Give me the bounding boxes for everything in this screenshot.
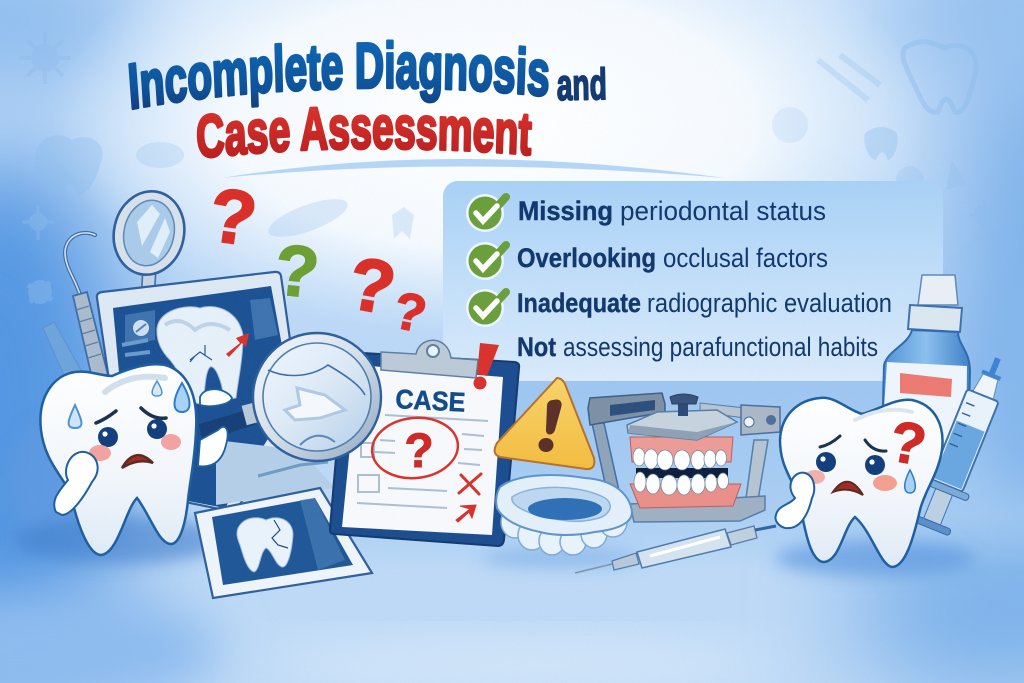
icon: worried tooth right xyxy=(775,398,943,567)
tear xyxy=(905,470,915,493)
icon: aligner tray xyxy=(496,475,632,555)
decorative swoosh under title xyxy=(222,159,725,178)
panel: checklist xyxy=(443,181,943,381)
row: missing periodontal status xyxy=(466,194,826,232)
icon: medicine bottle xyxy=(882,275,970,450)
upper gum xyxy=(630,437,733,462)
panel: small x-ray film xyxy=(195,488,372,598)
title word: and: and xyxy=(556,60,607,110)
icon: dental mirror xyxy=(106,185,192,302)
lower teeth xyxy=(634,472,728,495)
title line 1: Incomplete Diagnosis xyxy=(128,40,549,110)
doodle: germ top left xyxy=(19,32,71,84)
row: overlooking occlusal factors: Overlooking xyxy=(517,243,656,273)
faded dental doodles xyxy=(19,32,1000,304)
row: inadequate radiographic evaluation: radiographic evaluation xyxy=(647,288,892,318)
sweat drops xyxy=(69,405,81,428)
icon: clipboard xyxy=(330,340,519,546)
hand xyxy=(775,473,814,528)
icon: magnifying glass xyxy=(198,333,381,466)
ground shadows xyxy=(10,415,975,576)
title line 2: Case Assessment xyxy=(196,106,532,158)
lower scan detail xyxy=(216,440,335,505)
row: not assessing parafunctional habits: Not xyxy=(517,332,556,362)
question mark green: ? xyxy=(271,230,323,314)
row: inadequate radiographic evaluation: Inadequate xyxy=(517,288,641,318)
icon: warning triangle xyxy=(495,378,594,469)
form lines xyxy=(357,415,488,508)
lower gum xyxy=(630,484,741,508)
row: overlooking occlusal factors: occlusal factors xyxy=(663,243,828,273)
face xyxy=(816,452,836,472)
upper teeth xyxy=(633,448,726,470)
icon: bottom syringe xyxy=(575,526,776,573)
hand xyxy=(54,452,98,515)
icon: right syringe xyxy=(906,349,1021,537)
title xyxy=(128,40,607,158)
icon: clipboard: ? xyxy=(404,425,434,478)
row: not assessing parafunctional habits: assessing parafunctional habits xyxy=(563,332,878,362)
red arrow mark xyxy=(456,505,476,522)
icon: small cartridge background xyxy=(43,322,82,384)
gripping hand xyxy=(198,389,232,466)
clip xyxy=(381,340,478,378)
icon: worried tooth left xyxy=(40,364,196,555)
face xyxy=(98,427,118,447)
tooth on monitor xyxy=(157,306,243,405)
red cross xyxy=(459,474,481,494)
red arrow on monitor xyxy=(226,333,249,357)
circled question xyxy=(369,414,461,482)
icon: dental articulator xyxy=(588,393,780,522)
row: overlooking occlusal factors xyxy=(466,242,828,280)
question mark red two: ? xyxy=(343,241,402,330)
question mark red three: ? xyxy=(388,281,431,345)
icon: dental probe xyxy=(65,233,108,378)
row: missing periodontal status: periodontal status xyxy=(620,196,826,226)
film tooth xyxy=(237,518,293,572)
row: missing periodontal status: Missing xyxy=(518,196,613,226)
panel: x-ray monitor xyxy=(97,272,335,512)
case label: CASE xyxy=(395,384,466,418)
row: inadequate radiographic evaluation xyxy=(466,288,892,327)
question mark on tooth: ? xyxy=(885,408,931,479)
question mark red one: ? xyxy=(204,172,262,263)
red exclamation xyxy=(477,343,499,376)
